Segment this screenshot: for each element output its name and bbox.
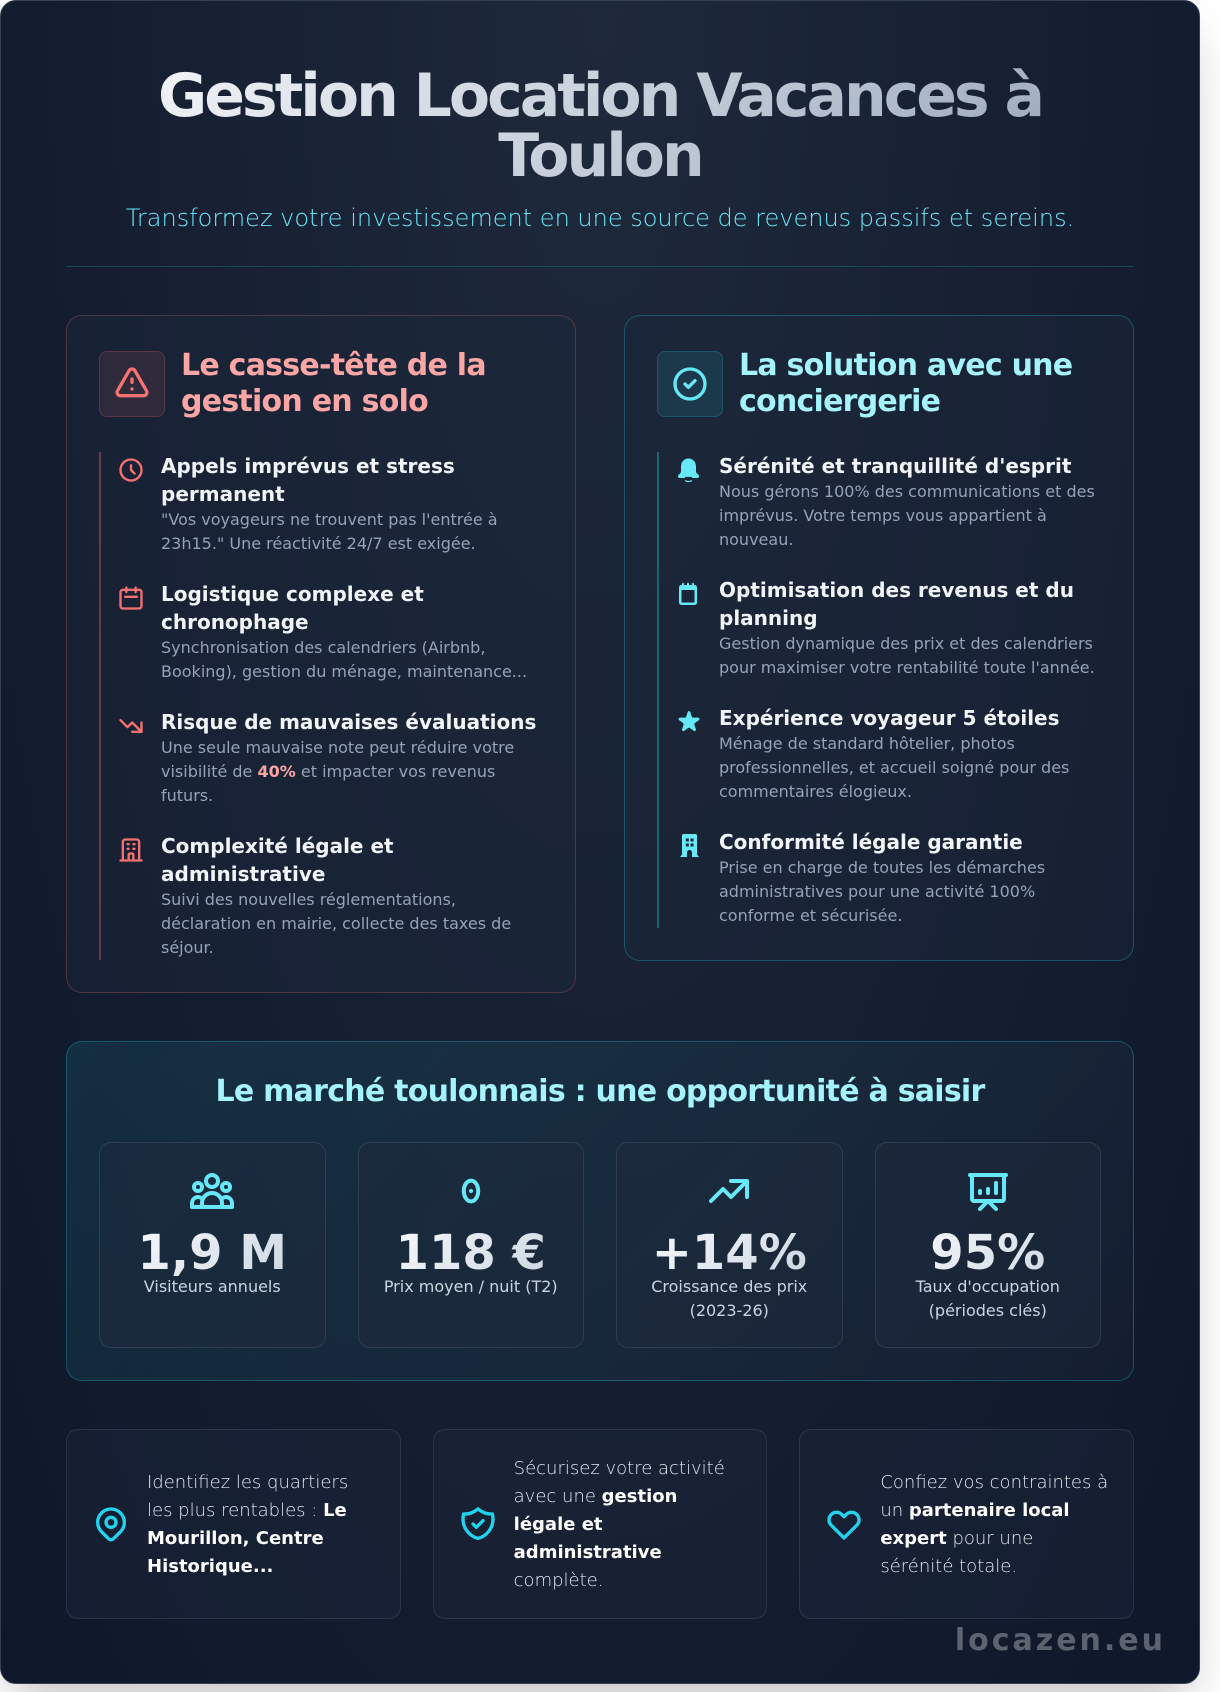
icon: map pin	[96, 1507, 126, 1542]
problem text: Logistique complexe et chronophage	[161, 582, 424, 634]
problem text: Appels imprévus et stress permanent	[161, 454, 455, 506]
solution text: Gestion dynamique des prix et des calendriers pour maximiser votre rentabilité toute l'année.	[719, 634, 1095, 677]
solution: peace of mind	[678, 454, 1095, 549]
icon: office building	[119, 838, 143, 862]
heading text: Le casse-tête de la gestion en solo	[181, 348, 486, 419]
brand watermark: locazen.eu	[955, 1623, 1166, 1658]
icon: currency	[462, 1178, 480, 1204]
takeaway text: Confiez vos contraintes à un partenaire local expert pour une sérénité totale.	[880, 1472, 1108, 1577]
panel: concierge solution	[624, 315, 1134, 961]
icon: warning triangle	[99, 351, 165, 417]
icon: shield check	[461, 1507, 495, 1540]
icon: clock	[119, 458, 143, 482]
problem text	[161, 454, 498, 553]
solution list	[657, 452, 1101, 928]
stat: occupancy	[874, 1142, 1101, 1348]
icon: solid calendar	[679, 582, 697, 605]
takeaway: neighbourhoods	[66, 1429, 401, 1619]
label: Prix moyen / nuit (T2)	[384, 1277, 558, 1296]
problem text	[161, 710, 536, 805]
solution text: Prise en charge de toutes les démarches administratives pour une activité 100% conforme et sécurisée.	[719, 858, 1045, 925]
problem text: Une seule mauvaise note peut réduire votre visibilité de 40% et impacter vos revenus futurs.	[161, 738, 514, 805]
market heading: Le marché toulonnais : une opportunité à saisir	[215, 1074, 985, 1109]
solution text: Expérience voyageur 5 étoiles	[719, 706, 1060, 730]
stat: price growth	[616, 1142, 842, 1348]
solution: legal compliance	[680, 830, 1045, 925]
solution text	[719, 578, 1095, 677]
problem text: Risque de mauvaises évaluations	[161, 710, 536, 734]
stat: average price	[358, 1142, 584, 1348]
panel: problems of solo management	[66, 315, 576, 993]
solution: five star experience	[678, 706, 1069, 801]
problem: logistics	[119, 582, 527, 681]
problem text: Suivi des nouvelles réglementations, déclaration en mairie, collecte des taxes de séjour.	[161, 890, 511, 957]
icon: bell	[678, 458, 699, 482]
problem text: Synchronisation des calendriers (Airbnb, Booking), gestion du ménage, maintenance...	[161, 638, 527, 681]
icon: solid building	[680, 834, 699, 857]
title: Gestion Location Vacances à Toulon	[158, 61, 1042, 191]
value	[900, 1229, 1076, 1277]
problem text	[161, 582, 527, 681]
icon: trending down	[119, 718, 143, 734]
label: Croissance des prix (2023-26)	[651, 1277, 807, 1320]
problem list	[99, 452, 543, 960]
key takeaways row	[66, 1429, 1134, 1619]
takeaway text: Sécurisez votre activité avec une gestion légale et administrative complète.	[514, 1458, 725, 1591]
value: +14%	[652, 1225, 807, 1281]
takeaway: local partner	[799, 1429, 1134, 1619]
panel heading: problems	[99, 348, 486, 419]
panel: Toulon market stats	[66, 1041, 1134, 1381]
problem: bad reviews	[119, 710, 536, 805]
solution: revenue optimisation	[679, 578, 1095, 677]
solution text: Sérénité et tranquillité d'esprit	[719, 454, 1071, 478]
icon: check circle	[657, 351, 723, 417]
value: 1,9 M	[137, 1225, 287, 1281]
label: Visiteurs annuels	[144, 1277, 281, 1296]
value: 95%	[930, 1225, 1045, 1281]
panel heading: solution	[657, 348, 1072, 419]
problem: legal complexity	[119, 834, 511, 957]
icon: heart	[827, 1510, 861, 1540]
icon: presentation chart	[968, 1173, 1008, 1212]
problem text: Complexité légale et administrative	[161, 834, 394, 886]
problem text: "Vos voyageurs ne trouvent pas l'entrée à 23h15." Une réactivité 24/7 est exigée.	[161, 510, 498, 553]
solution text: Nous gérons 100% des communications et des imprévus. Votre temps vous appartient à nouveau.	[719, 482, 1095, 549]
solution text: Optimisation des revenus et du planning	[719, 578, 1074, 630]
icon: user group	[190, 1173, 234, 1209]
value: 118 €	[396, 1225, 546, 1281]
icon: trending up	[708, 1178, 750, 1204]
icon: star	[678, 711, 700, 732]
stat cards	[99, 1142, 1101, 1348]
problem: unexpected calls	[119, 454, 498, 553]
solution text: Conformité légale garantie	[719, 830, 1023, 854]
problem text	[161, 834, 511, 957]
icon: calendar	[119, 586, 143, 610]
label: Taux d'occupation (périodes clés)	[916, 1277, 1060, 1320]
subtitle: Transformez votre investissement en une source de revenus passifs et sereins.	[126, 204, 1074, 232]
heading text: La solution avec une conciergerie	[739, 348, 1072, 419]
stat: visitors	[99, 1142, 326, 1348]
takeaway text: Identifiez les quartiers les plus rentables : Le Mourillon, Centre Historique...	[147, 1472, 348, 1577]
solution text: Ménage de standard hôtelier, photos professionnelles, et accueil soigné pour des commentaires élogieux.	[719, 734, 1069, 801]
takeaway: legal security	[433, 1429, 767, 1619]
